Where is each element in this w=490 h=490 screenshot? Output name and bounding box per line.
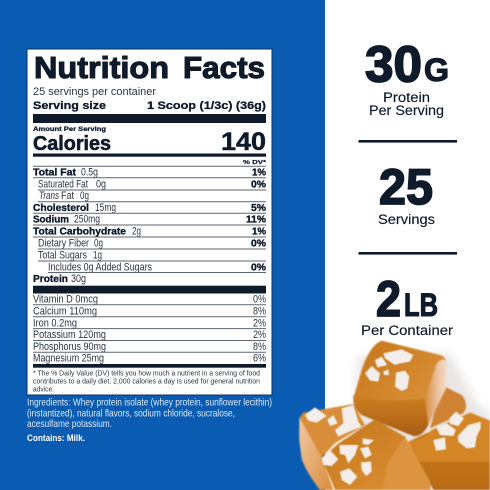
trans fat: Trans — [39, 190, 60, 202]
allergen statement: Contains: Milk. — [27, 432, 85, 443]
stat: 25 servings: 25 — [379, 159, 433, 215]
vitamin d — [33, 294, 266, 306]
total sugars: 1g — [93, 250, 102, 262]
magnesium: Magnesium 25mg — [33, 353, 104, 365]
dietary fiber: Dietary Fiber — [38, 238, 89, 250]
servings per container: 25 servings per container — [33, 86, 156, 98]
calories row: 140 — [221, 128, 266, 156]
panel: nutrition facts label — [27, 49, 272, 395]
stat: 30g protein per serving: Per Serving — [369, 103, 444, 118]
iron: 2% — [253, 317, 266, 329]
serving size row — [33, 100, 266, 112]
stat: 2lb per container: LB — [404, 287, 438, 323]
added sugars: Includes 0g Added Sugars — [48, 261, 152, 273]
calories row — [33, 128, 266, 156]
total carbohydrate — [33, 226, 266, 238]
total carbohydrate: Total Carbohydrate — [33, 227, 126, 238]
cholesterol — [33, 202, 266, 214]
dietary fiber: 0g — [94, 238, 103, 250]
total sugars: Total Sugars — [38, 250, 87, 262]
nutrient rows — [33, 167, 266, 285]
saturated fat — [38, 179, 266, 191]
sodium: Sodium — [33, 215, 69, 226]
cholesterol: Cholesterol — [33, 203, 89, 214]
phosphorus: 8% — [253, 341, 266, 353]
sodium — [33, 214, 266, 226]
heading: Nutrition Facts: Facts — [183, 50, 265, 85]
protein: 30g — [71, 273, 86, 285]
calcium: 8% — [253, 306, 266, 318]
sodium: 250mg — [74, 214, 100, 226]
heading: Nutrition Facts: Nutrition — [34, 50, 169, 85]
added sugars: 0% — [251, 262, 266, 273]
footnote: * The % Daily Value (DV) tells you how much a nutrient in a serving of food — [33, 371, 260, 378]
trans fat — [39, 190, 89, 202]
heading: Nutrition Facts — [34, 50, 265, 85]
vitamin d: 0% — [253, 294, 266, 306]
dietary fiber: 0% — [251, 239, 266, 250]
serving size row: Serving size — [33, 100, 106, 112]
salt flakes — [305, 349, 481, 485]
potassium: 2% — [253, 329, 266, 341]
calcium: Calcium 110mg — [33, 306, 97, 318]
stat: 30g protein per serving: G — [424, 52, 449, 88]
calcium — [33, 306, 266, 318]
phosphorus: Phosphorus 90mg — [33, 341, 106, 353]
stat: 2lb per container: Per Container — [361, 323, 454, 338]
added sugars — [48, 261, 266, 273]
centre caramel — [322, 419, 431, 490]
phosphorus — [33, 341, 266, 353]
trans fat: Fat — [61, 190, 74, 202]
footnote: advice. — [33, 386, 54, 393]
trans fat: 0g — [80, 190, 89, 202]
vitamin d: Vitamin D 0mcg — [33, 294, 98, 306]
saturated fat: Saturated Fat — [38, 179, 88, 191]
ingredients text — [27, 397, 272, 430]
magnesium — [33, 353, 266, 365]
total fat: 0.5g — [81, 167, 98, 179]
stat: 2lb per container — [361, 271, 454, 338]
stat: 25 servings: Servings — [378, 212, 435, 227]
blue background panel — [0, 0, 325, 490]
ingredients text: acesulfame potassium. — [27, 419, 112, 430]
back caramel — [430, 385, 466, 428]
vitamins and minerals — [33, 294, 266, 365]
iron: Iron 0.2mg — [33, 317, 77, 329]
sodium: 11% — [246, 215, 266, 226]
left caramel — [299, 404, 365, 490]
potassium: Potassium 120mg — [33, 329, 106, 341]
image: salted caramel cubes — [299, 341, 490, 490]
saturated fat: 0% — [251, 180, 266, 191]
total carbohydrate: 2g — [132, 226, 141, 238]
total fat: 1% — [252, 168, 266, 179]
iron — [33, 317, 266, 329]
amount per serving: Amount Per Serving — [33, 126, 106, 133]
stat: 30g protein per serving — [365, 36, 449, 118]
calories row: Calories — [33, 133, 111, 155]
ingredients text: (instantized), natural flavors, sodium chloride, sucralose, — [27, 408, 235, 419]
total fat — [33, 167, 266, 179]
footnote: contributes to a daily diet. 2,000 calories a day is used for general nutrition — [33, 378, 260, 386]
protein — [33, 273, 86, 285]
footnote — [33, 371, 260, 393]
percent daily value header: % DV* — [243, 160, 267, 166]
saturated fat: 0g — [96, 179, 106, 191]
cholesterol: 5% — [251, 203, 266, 214]
top caramel — [353, 341, 447, 436]
stat: 30g protein per serving: Protein — [383, 90, 430, 105]
stat: 30g protein per serving: 30 — [365, 36, 422, 92]
cholesterol: 15mg — [95, 202, 116, 214]
potassium — [33, 329, 266, 341]
protein: Protein — [33, 274, 68, 285]
serving size row: 1 Scoop (1/3c) (36g) — [147, 100, 266, 112]
total carbohydrate: 1% — [252, 227, 266, 238]
ingredients text: Ingredients: Whey protein isolate (whey protein, sunflower lecithin) — [27, 397, 272, 408]
dietary fiber — [38, 238, 266, 250]
stat: 2lb per container: 2 — [376, 271, 401, 327]
right caramel — [408, 413, 490, 490]
total fat: Total Fat — [33, 168, 77, 179]
magnesium: 6% — [253, 353, 266, 365]
